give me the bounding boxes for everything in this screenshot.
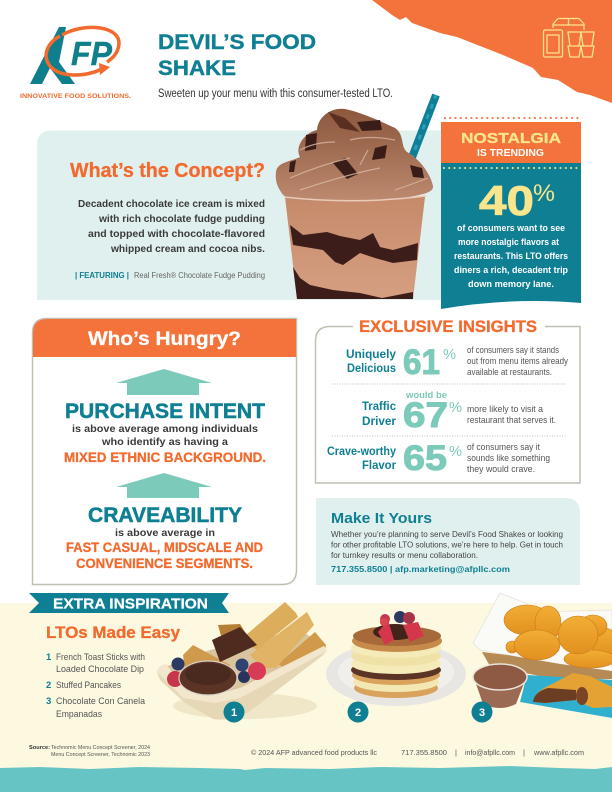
orange dotted line <box>444 117 580 119</box>
hungry header band <box>33 319 296 357</box>
make it yours body: for turnkey results or menu collaboration. <box>331 550 478 560</box>
concept description: with rich chocolate fudge pudding <box>98 213 265 225</box>
purchase intent segment: MIXED ETHNIC BACKGROUND. <box>64 449 266 465</box>
pancake stack <box>351 626 442 698</box>
craveability segments: CONVENIENCE SEGMENTS. <box>76 555 253 571</box>
purchase intent text: is above average among individuals <box>72 423 258 435</box>
insights heading: EXCLUSIVE INSIGHTS <box>359 317 537 336</box>
image: chocolate shake <box>276 95 436 299</box>
footer contact: 717.355.8500 <box>401 748 447 757</box>
insight: crave-worthy flavor: of consumers say it <box>467 442 540 452</box>
insight: traffic driver <box>362 390 556 435</box>
pancake berries <box>373 611 424 645</box>
blue napkin <box>520 675 612 718</box>
number badge 2: 2 <box>355 707 361 719</box>
number badge 3 <box>472 702 492 722</box>
insight: traffic driver: 67 <box>403 396 448 435</box>
extra inspiration ribbon: EXTRA INSPIRATION <box>53 596 208 612</box>
LTO list: French Toast Sticks with <box>56 652 145 663</box>
panel: what's the concept <box>37 130 445 300</box>
LTO list: 1 <box>46 652 52 663</box>
yellow dotted line <box>443 167 580 169</box>
craveability segments <box>66 539 263 571</box>
berries <box>167 658 266 687</box>
number badge 3: 3 <box>479 707 485 719</box>
dipping cup <box>473 664 527 708</box>
insight: crave-worthy flavor: 65 <box>403 439 447 478</box>
insight: traffic driver: Driver <box>362 416 397 428</box>
extra inspiration ribbon <box>29 593 229 613</box>
insight: traffic driver: restaurant that serves it. <box>467 415 556 425</box>
number badge 1: 1 <box>231 707 237 719</box>
40 percent: 40 <box>479 177 534 224</box>
footer contact: www.afpllc.com <box>533 748 584 757</box>
insight: uniquely delicious: of consumers say it stands <box>467 345 559 355</box>
arrow: craveability <box>116 473 212 498</box>
straw <box>411 95 436 160</box>
craveability text: is above average in <box>115 527 215 539</box>
40 percent: % <box>533 180 555 207</box>
insight: crave-worthy flavor: % <box>449 443 462 460</box>
insight: crave-worthy flavor: Crave-worthy <box>327 446 397 458</box>
panel: exclusive insights <box>316 317 580 483</box>
title: SHAKE <box>158 57 236 80</box>
insight: uniquely delicious: % <box>443 346 456 363</box>
source note: Source: <box>29 745 50 751</box>
LTO list: 3 <box>46 696 51 707</box>
concept description <box>78 198 265 255</box>
source note <box>29 745 150 758</box>
orange torn corner <box>372 0 612 103</box>
40 percent <box>479 177 555 224</box>
subtitle: Sweeten up your menu with this consumer-tested LTO. <box>158 88 393 100</box>
arrow: purchase intent <box>116 369 212 395</box>
insight: crave-worthy flavor <box>327 439 550 478</box>
callout text: restaurants. This LTO offers <box>454 251 568 261</box>
fudge layers <box>290 225 418 299</box>
cut empanada <box>533 673 612 708</box>
purchase intent text: who identify as having a <box>101 436 228 448</box>
insight: uniquely delicious: 61 <box>403 343 440 382</box>
insight: traffic driver: Traffic <box>362 401 397 413</box>
chocolate dip <box>179 661 237 695</box>
insight: traffic driver: more likely to visit a <box>467 404 544 414</box>
LTO list: Stuffed Pancakes <box>56 680 121 691</box>
insight: traffic driver: would be <box>405 390 447 401</box>
whip highlights <box>290 138 428 190</box>
plate <box>326 642 466 706</box>
concept heading: What’s the Concept? <box>70 160 265 182</box>
concept description: whipped cream and cocoa nibs. <box>110 243 265 255</box>
image: stuffed pancakes <box>326 611 466 722</box>
footer contact: © 2024 AFP advanced food products llc <box>251 748 377 757</box>
craveability segments: FAST CASUAL, MIDSCALE AND <box>66 539 263 555</box>
callout text: diners a rich, decadent trip <box>454 265 568 275</box>
concept description: and topped with chocolate-flavored <box>88 228 265 240</box>
insight: uniquely delicious: available at restaurants. <box>467 367 552 377</box>
icon: packaging and cups <box>544 18 594 57</box>
paper liner <box>473 593 612 672</box>
contact line: 717.355.8500 | afp.marketing@afpllc.com <box>331 564 510 574</box>
LTO list: Loaded Chocolate Dip <box>56 664 144 675</box>
purchase intent heading: PURCHASE INTENT <box>65 400 265 423</box>
number badge 1 <box>224 702 244 722</box>
pastries <box>504 605 612 668</box>
image: empanadas <box>472 593 612 722</box>
tray body <box>157 646 327 720</box>
logo letter A <box>30 27 75 84</box>
make it yours body <box>331 529 563 560</box>
featuring line: | FEATURING | <box>75 271 129 280</box>
insight: crave-worthy flavor: sounds like something <box>467 453 550 463</box>
whipped cream <box>276 109 433 201</box>
insight: traffic driver: % <box>449 399 462 416</box>
make it yours heading: Make It Yours <box>331 510 432 527</box>
footer contact: | <box>455 748 457 757</box>
insight: crave-worthy flavor: Flavor <box>362 460 397 472</box>
callout text <box>454 223 568 289</box>
callout heading: NOSTALGIA <box>461 130 561 147</box>
callout orange header <box>441 122 581 163</box>
logo <box>20 27 131 100</box>
chocolate dipped tip <box>212 627 257 662</box>
tray interior <box>162 630 325 695</box>
basket <box>482 652 612 680</box>
insight: uniquely delicious: Uniquely <box>346 349 397 361</box>
LTO list: Chocolate Con Canela <box>56 696 146 707</box>
title: DEVIL’S FOOD <box>158 31 316 54</box>
footer contact <box>251 748 584 757</box>
insight: uniquely delicious: Delicious <box>347 363 396 375</box>
cup rim <box>284 196 426 201</box>
featuring line: Real Fresh® Chocolate Fudge Pudding <box>134 271 265 280</box>
panel: extra inspiration background <box>0 603 612 773</box>
craveability heading: CRAVEABILITY <box>88 504 242 527</box>
source note: Menu Concept Screener, Technomic 2023 <box>51 752 150 758</box>
make it yours body: for other profitable LTO solutions, we’re here to help. Get in touch <box>331 540 563 550</box>
toast sticks <box>183 602 326 680</box>
teal torn footer band <box>0 766 612 792</box>
footer contact: | <box>523 748 525 757</box>
cup <box>285 197 425 299</box>
chocolate shavings <box>289 112 424 179</box>
logo orange swoosh <box>46 27 119 75</box>
panel: nostalgia callout <box>441 118 581 309</box>
featuring line <box>75 271 265 280</box>
logo tagline: INNOVATIVE FOOD SOLUTIONS. <box>20 93 131 100</box>
purchase intent text <box>72 423 258 448</box>
callout text: of consumers want to see <box>457 223 565 233</box>
make it yours body: Whether you’re planning to serve Devil’s Food Shakes or looking <box>331 529 563 539</box>
LTO list <box>46 652 146 720</box>
source note: Technomic Menu Concept Screener, 2024 <box>51 745 150 751</box>
image: french toast sticks <box>157 602 327 722</box>
insight: uniquely delicious <box>346 343 568 382</box>
insight: uniquely delicious: out from menu items already <box>467 356 568 366</box>
callout subheading: IS TRENDING <box>477 148 544 159</box>
concept description: Decadent chocolate ice cream is mixed <box>78 198 265 210</box>
panel: make it yours <box>316 498 580 585</box>
panel: who's hungry <box>32 318 296 584</box>
LTO list: 2 <box>46 680 51 691</box>
title <box>158 31 316 80</box>
insight: crave-worthy flavor: they would crave. <box>467 464 535 474</box>
tray shadow <box>173 693 317 719</box>
callout text: more nostalgic flavors at <box>458 237 559 247</box>
footer contact: info@afpllc.com <box>465 748 515 757</box>
LTOs heading: LTOs Made Easy <box>46 623 181 642</box>
hungry heading: Who’s Hungry? <box>88 329 241 350</box>
callout text: down memory lane. <box>468 279 554 289</box>
logo letters FP: FP <box>71 35 113 72</box>
LTO list: Empanadas <box>56 709 102 720</box>
callout teal ribbon <box>441 163 581 309</box>
